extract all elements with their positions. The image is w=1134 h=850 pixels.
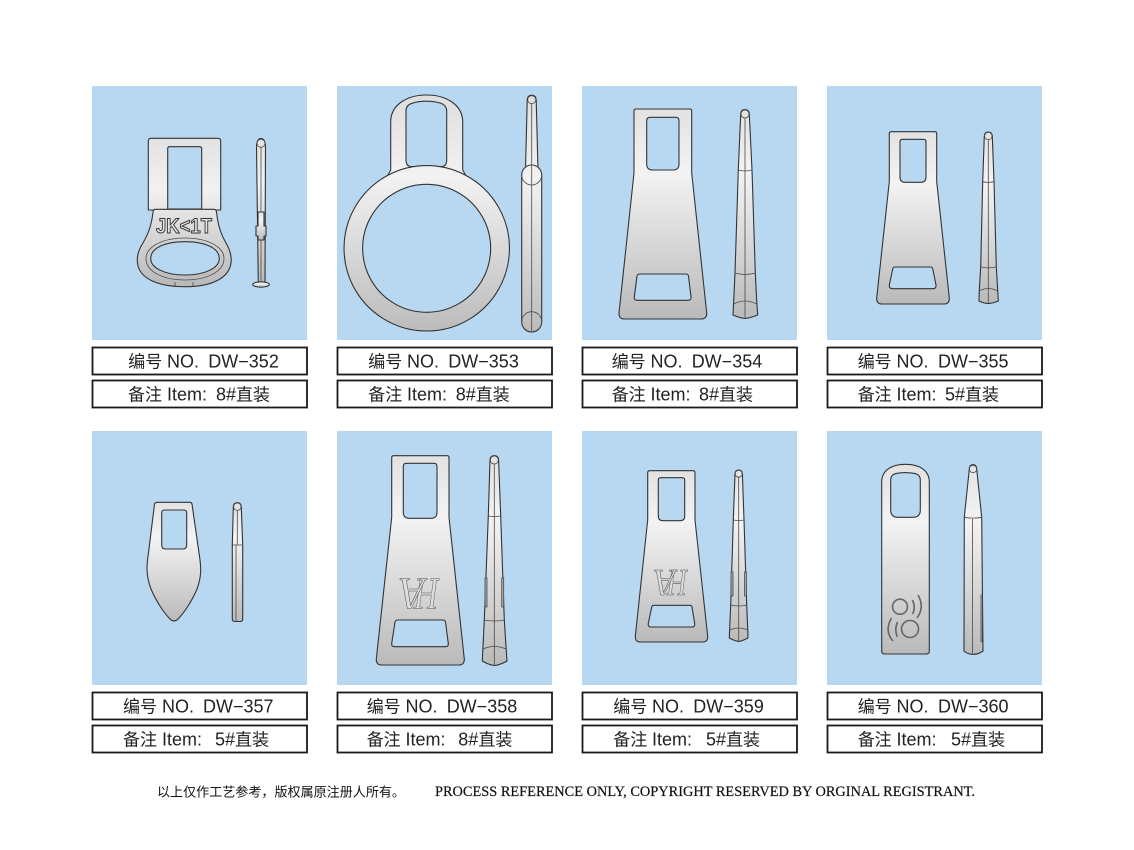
- label: DW-353 number: 编号: [368, 352, 402, 372]
- icon: DW-357 front view: [147, 502, 201, 621]
- label: DW-358 item: 8#直装: [458, 730, 512, 750]
- label: DW-354 item: Item:: [650, 384, 691, 404]
- label: DW-359 item: 5#直装: [706, 730, 760, 750]
- label: DW-355 number: NO.: [896, 352, 929, 372]
- label: DW-357 number: 编号: [123, 698, 157, 716]
- label: DW-360 number: NO.: [896, 696, 929, 716]
- label: DW-355 number: DW−355: [938, 352, 1009, 372]
- label: DW-358 number: 编号: [367, 698, 401, 716]
- logo: rings and arcs: [888, 595, 921, 641]
- label: DW-357 item: [92, 726, 307, 752]
- label: DW-354 number: NO.: [650, 352, 683, 372]
- icon: DW-360 front view: [882, 464, 929, 654]
- label: DW-354 number: [582, 348, 797, 374]
- icon: DW-355 side view: [979, 132, 998, 304]
- icon: DW-360 side view: [964, 465, 983, 654]
- label: DW-357 number: [92, 692, 307, 720]
- icon: DW-354 side view: [733, 110, 758, 318]
- panel: DW-358: [337, 431, 552, 685]
- label: DW-353 number: [338, 348, 552, 374]
- label: DW-360 item: Item:: [896, 730, 937, 750]
- panel: DW-357: [92, 431, 307, 685]
- label: DW-360 item: 备注: [858, 730, 892, 750]
- logo: JK<1T: JK<1T: [156, 215, 212, 238]
- icon: DW-357 side view: [232, 503, 243, 622]
- icon: DW-359 front view: [635, 471, 708, 642]
- panel: DW-359: [582, 431, 797, 685]
- label: DW-359 item: [582, 726, 797, 752]
- logo: VH monogram: H: [413, 569, 440, 619]
- label: DW-357 item: Item:: [162, 730, 202, 750]
- label: DW-359 item: Item:: [652, 730, 692, 750]
- icon: DW-353 side view: [522, 95, 542, 332]
- label: DW-360 item: 5#直装: [951, 730, 1005, 750]
- icon: DW-352 side view: [253, 138, 269, 287]
- panel: DW-354: [582, 86, 797, 340]
- label: DW-355 number: 编号: [858, 352, 892, 372]
- icon: DW-358 front view: [376, 456, 464, 665]
- label: DW-359 number: 编号: [613, 698, 647, 716]
- label: DW-354 number: 编号: [612, 352, 646, 372]
- icon: DW-355 front view: [877, 132, 949, 304]
- label: DW-360 number: [828, 692, 1042, 720]
- label: DW-359 number: NO.: [652, 696, 684, 716]
- label: DW-352 number: DW−352: [208, 352, 279, 372]
- label: DW-357 number: NO.: [162, 696, 194, 716]
- label: DW-357 item: 5#直装: [215, 730, 269, 750]
- label: DW-358 number: NO.: [406, 696, 438, 716]
- label: DW-357 number: DW−357: [203, 696, 274, 716]
- label: DW-353 number: NO.: [407, 352, 439, 372]
- label: DW-355 item: Item:: [896, 384, 937, 404]
- label: DW-355 item: 备注: [858, 386, 892, 404]
- label: DW-353 item: [338, 380, 552, 408]
- icon: DW-353 front view: [344, 95, 509, 331]
- label: DW-352 number: 编号: [128, 352, 162, 372]
- label: DW-352 item: 备注: [128, 386, 162, 404]
- label: DW-354 item: 8#直装: [699, 384, 753, 404]
- label: DW-360 number: 编号: [858, 698, 892, 716]
- icon: DW-358 side view: [482, 456, 507, 666]
- logo: VH monogram: A: [654, 561, 678, 603]
- label: DW-352 item: [92, 380, 307, 408]
- label: DW-354 item: [582, 380, 797, 408]
- icon: DW-359 side view: [729, 470, 748, 642]
- label: DW-360 item: [828, 726, 1042, 752]
- logo: VH monogram: H: [666, 561, 688, 603]
- label: DW-353 item: Item:: [407, 384, 447, 404]
- label: DW-354 number: DW−354: [692, 352, 762, 372]
- label: DW-358 number: DW−358: [447, 696, 517, 716]
- label: DW-353 item: 备注: [368, 386, 402, 404]
- footer note: English: PROCESS REFERENCE ONLY, COPYRIGHT RESERVED BY ORGINAL REGISTRANT.: [435, 784, 975, 800]
- label: DW-352 number: NO.: [167, 352, 199, 372]
- label: DW-352 item: Item:: [167, 384, 207, 404]
- icon: DW-352 front view: [137, 138, 231, 287]
- logo: VH monogram: A: [400, 569, 428, 619]
- panel: DW-360: [827, 431, 1042, 685]
- label: DW-355 number: [828, 348, 1042, 374]
- label: DW-353 item: 8#直装: [456, 384, 510, 404]
- label: DW-357 item: 备注: [123, 730, 157, 750]
- label: DW-359 number: DW−359: [693, 696, 764, 716]
- label: DW-358 item: 备注: [367, 730, 401, 750]
- panel: DW-353: [337, 86, 552, 340]
- label: DW-358 item: [338, 726, 552, 752]
- label: DW-355 item: [828, 380, 1042, 408]
- panel: DW-355: [827, 86, 1042, 340]
- label: DW-352 number: [92, 348, 307, 374]
- label: DW-352 item: 8#直装: [216, 384, 270, 404]
- label: DW-354 item: 备注: [612, 386, 646, 404]
- label: DW-360 number: DW−360: [938, 696, 1009, 716]
- label: DW-359 number: [582, 692, 797, 720]
- label: DW-358 number: [338, 692, 552, 720]
- footer note: Chinese: 以上仅作工艺参考，版权属原注册人所有。: [157, 784, 405, 800]
- label: DW-355 item: 5#直装: [945, 384, 999, 404]
- icon: DW-354 front view: [619, 109, 707, 319]
- label: DW-358 item: Item:: [406, 730, 446, 750]
- label: DW-359 item: 备注: [613, 730, 647, 750]
- panel: DW-352: [92, 86, 307, 340]
- label: DW-353 number: DW−353: [448, 352, 519, 372]
